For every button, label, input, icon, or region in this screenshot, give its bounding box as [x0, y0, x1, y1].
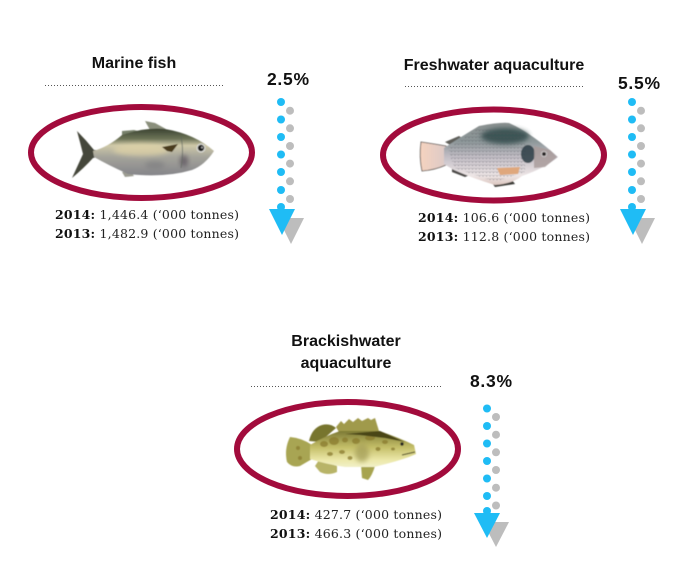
heading: marine fish: Marine fish	[92, 55, 176, 72]
arrow: decline trend	[474, 404, 509, 547]
arrow: decline trend	[620, 98, 655, 244]
panel: brackishwater aquaculture: aquaculture	[301, 355, 391, 372]
ellipse frame: freshwater	[383, 110, 604, 200]
ellipse frame: marine fish	[31, 107, 252, 198]
percentage: 2.5%: 2.5%	[267, 69, 309, 89]
data: 2013 value: 2013: 466.3 (‘000 tonnes)	[270, 526, 442, 541]
divider	[45, 84, 224, 86]
divider	[251, 386, 442, 388]
data: 2014 value: 2014: 1,446.4 (‘000 tonnes)	[55, 207, 239, 222]
panel: brackishwater aquaculture	[237, 333, 512, 547]
data: 2014 value: 2014: 427.7 (‘000 tonnes)	[270, 507, 442, 522]
percentage: 5.5%: 5.5%	[618, 73, 660, 93]
data: 2013 value: 2013: 112.8 (‘000 tonnes)	[418, 229, 590, 244]
panel: marine fish	[31, 55, 309, 244]
data: 2014 value: 2014: 106.6 (‘000 tonnes)	[418, 210, 590, 225]
icon: freshwater fish	[420, 123, 558, 187]
ellipse frame: brackishwater	[237, 402, 458, 496]
percentage: 8.3%: 8.3%	[470, 371, 512, 391]
data: 2013 value: 2013: 1,482.9 (‘000 tonnes)	[55, 226, 239, 241]
icon: marine fish	[72, 121, 214, 178]
heading: freshwater aquaculture: Freshwater aquaculture	[404, 57, 584, 74]
divider	[405, 86, 585, 88]
icon: brackishwater fish	[286, 418, 416, 480]
panel: freshwater aquaculture	[383, 57, 660, 244]
arrow: decline trend	[269, 98, 304, 244]
heading: brackishwater aquaculture: Brackishwater	[291, 333, 401, 350]
